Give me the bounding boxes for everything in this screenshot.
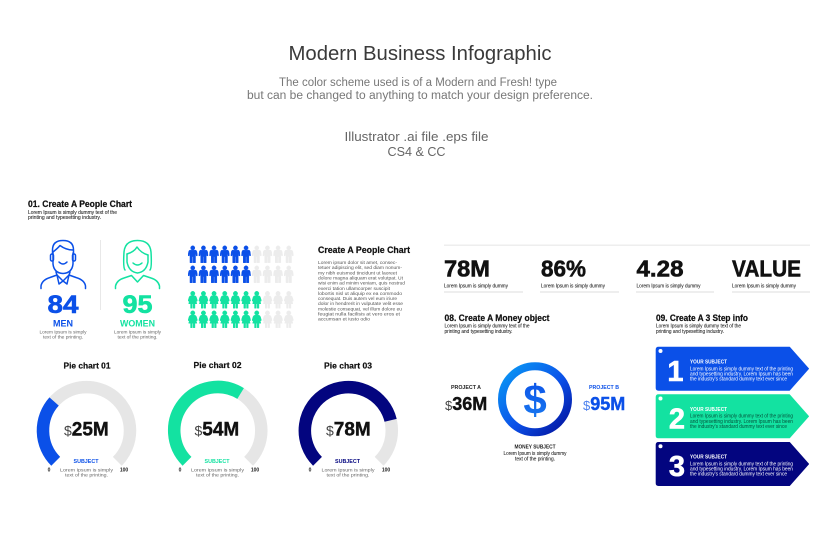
money subject caption: MONEY SUBJECT: [514, 444, 556, 450]
panel: money object: [445, 366, 625, 462]
text block: people chart description: accumsan et iusto odio: [318, 317, 370, 322]
step 3: Lorem Ipsum is simply dummy text of the printing: [690, 462, 793, 468]
file formats note: [344, 129, 488, 159]
gauge chart: [43, 387, 130, 461]
heading: money object: Lorem Ipsum is simply dummy text of the: [444, 324, 530, 330]
scale labels: 100: [120, 468, 128, 474]
men pictogram rows: [188, 246, 294, 283]
panel: 3 step info: [656, 347, 808, 486]
value: $54M: [194, 420, 239, 440]
money subject caption: Lorem Ipsum is simply dummy: [504, 451, 567, 457]
text block: people chart description: tetuer adipiscing elit, sed diam nonum-: [318, 265, 402, 270]
stat: VALUE: [732, 256, 810, 292]
scale labels: [48, 468, 128, 474]
icon: dollar coin: $: [523, 376, 547, 423]
stat: 4.28: Lorem Ipsum is simply dummy: [636, 284, 701, 290]
subtitle: The color scheme used is of a Modern and Fresh! type: [279, 77, 557, 89]
panel: pie chart 01: [43, 360, 130, 478]
project A: $36M: [445, 394, 487, 414]
heading: 3 step info: Lorem Ipsum is simply dummy text of the: [656, 324, 741, 330]
subtitle: [247, 77, 593, 102]
title: Modern Business Infographic: [288, 43, 552, 65]
heading: Pie chart 03: [324, 360, 372, 370]
caption: [60, 468, 114, 478]
caption: [322, 468, 375, 478]
step 3: YOUR SUBJECT: [690, 454, 727, 460]
women caption: text of the printing.: [118, 334, 158, 340]
step 3: [656, 442, 808, 486]
panel: men: [40, 240, 87, 340]
stat: 78M: 78M: [444, 256, 490, 282]
text block: people chart description: dolore magna aliquam erat volutpat. Ut: [318, 276, 404, 280]
gauge chart: [174, 387, 261, 461]
heading: money object: 08. Create A Money object: [444, 313, 550, 323]
scale labels: 0: [48, 468, 51, 474]
subtitle: but can be changed to anything to match your design preference.: [247, 90, 593, 102]
step 3: the industry's standard dummy text ever since: [690, 472, 787, 478]
step 2: Lorem Ipsum is simply dummy text of the printing: [690, 414, 793, 420]
text block: people chart description: [318, 245, 410, 322]
icon: dollar coin: [502, 366, 568, 432]
people pictogram chart: [188, 246, 294, 328]
women caption: Lorem Ipsum is simply: [114, 330, 162, 336]
panel: key stats: [444, 256, 810, 292]
panel: pie chart 02: [174, 360, 261, 478]
stat: 78M: [444, 256, 523, 292]
stat: 86%: 86%: [541, 256, 586, 282]
women pictogram rows: [188, 291, 294, 328]
panel: people chart heading: 01. Create A People Chart: [28, 199, 132, 209]
caption: text of the printing.: [65, 472, 108, 478]
heading: 3 step info: [656, 313, 748, 335]
text block: people chart description: lobortis nisl ut aliquip ex ea commodo: [318, 291, 402, 296]
icon: man: [41, 240, 86, 288]
men label: MEN: [53, 318, 73, 328]
step 1: [656, 347, 808, 390]
panel: women: [114, 240, 162, 340]
project A: [445, 385, 487, 414]
subject label: SUBJECT: [74, 459, 99, 465]
project B: [583, 385, 625, 414]
stat: 86%: [540, 256, 619, 292]
step 2: the industry's standard dummy text ever since: [690, 424, 787, 430]
text block: people chart description: consequat. Duis autem vel eum iriure: [318, 296, 397, 301]
subject label: SUBJECT: [335, 459, 361, 465]
caption: [191, 468, 245, 478]
project B: $95M: [583, 394, 625, 414]
heading: Pie chart 02: [194, 360, 242, 370]
project A: PROJECT A: [451, 385, 481, 391]
value: $78M: [326, 420, 371, 440]
caption: Lorem Ipsum is simply: [322, 468, 375, 474]
step 2: and typesetting industry. Lorem Ipsum has been: [690, 419, 793, 425]
panel: pie chart 03: [305, 360, 392, 478]
stat: 86%: Lorem Ipsum is simply dummy: [541, 284, 605, 290]
step 1: YOUR SUBJECT: [690, 360, 727, 366]
women label: WOMEN: [120, 318, 155, 328]
text block: people chart description: Lorem ipsum dolor sit amet, consec-: [318, 260, 397, 265]
step 3: 3: [669, 451, 685, 483]
caption: text of the printing.: [326, 472, 370, 478]
caption: Lorem Ipsum is simply: [60, 468, 114, 474]
file formats note: Illustrator .ai file .eps file: [344, 129, 488, 144]
panel: people chart heading: printing and typesetting industry.: [28, 215, 101, 221]
scale labels: 0: [179, 468, 182, 474]
text block: people chart description: feugiat nulla facilisis at vero eros et: [318, 312, 401, 316]
stat: 78M: Lorem Ipsum is simply dummy: [444, 284, 508, 290]
stat: VALUE: Lorem Ipsum is simply dummy: [732, 284, 796, 290]
heading: 3 step info: printing and typesetting industry.: [656, 329, 724, 335]
value: $25M: [64, 420, 109, 440]
file formats note: CS4 & CC: [388, 144, 446, 159]
stat: VALUE: VALUE: [732, 256, 801, 282]
header: [247, 43, 593, 159]
step 1: 1: [667, 356, 684, 388]
women caption: [114, 330, 162, 340]
step 1: the industry's standard dummy text ever since: [690, 376, 787, 382]
text block: people chart description: wisi enim ad minim veniam, quis nostrud: [318, 281, 405, 286]
text block: people chart description: dolor in hendrerit in vulputate velit esse: [318, 301, 403, 306]
step 2: YOUR SUBJECT: [690, 407, 727, 413]
text block: people chart description: molestie consequat, vel illum dolore eu: [318, 306, 402, 311]
men caption: Lorem Ipsum is simply: [40, 330, 87, 336]
heading: 3 step info: 09. Create A 3 Step info: [656, 313, 748, 323]
scale labels: 100: [251, 468, 259, 474]
project B: PROJECT B: [589, 385, 619, 391]
step 1: Lorem Ipsum is simply dummy text of the printing: [690, 366, 793, 372]
stat: 4.28: [636, 256, 714, 292]
men count: 84: [48, 291, 79, 319]
panel: people chart heading: Lorem Ipsum is simply dummy text of the: [28, 210, 117, 216]
money subject caption: text of the printing.: [515, 456, 555, 462]
text block: people chart description: Create A People Chart: [318, 245, 410, 255]
scale labels: [179, 468, 259, 474]
stat: 4.28: 4.28: [636, 256, 684, 282]
heading: money object: printing and typesetting industry.: [444, 329, 512, 335]
caption: Lorem Ipsum is simply: [191, 468, 245, 474]
text block: people chart description: exerci tation ullamcorper suscipit: [318, 286, 391, 291]
women count: 95: [122, 291, 153, 319]
money subject caption: [504, 444, 567, 462]
step 2: 2: [669, 404, 685, 436]
scale labels: 100: [382, 468, 390, 474]
heading: money object: [444, 313, 550, 335]
men caption: [40, 330, 87, 340]
text block: people chart description: my nibh euismod tincidunt ut laoreet: [318, 270, 398, 275]
scale labels: 0: [309, 468, 312, 474]
gauge chart: [305, 387, 392, 461]
heading: Pie chart 01: [64, 360, 111, 370]
scale labels: [309, 468, 390, 474]
step 1: and typesetting industry. Lorem Ipsum has been: [690, 372, 793, 378]
subject label: SUBJECT: [204, 459, 230, 465]
step 2: [656, 395, 808, 438]
icon: woman: [116, 240, 160, 288]
step 3: and typesetting industry. Lorem Ipsum has been: [690, 466, 793, 472]
panel: people chart heading: [28, 199, 132, 221]
men caption: text of the printing.: [43, 334, 83, 340]
caption: text of the printing.: [196, 472, 239, 478]
